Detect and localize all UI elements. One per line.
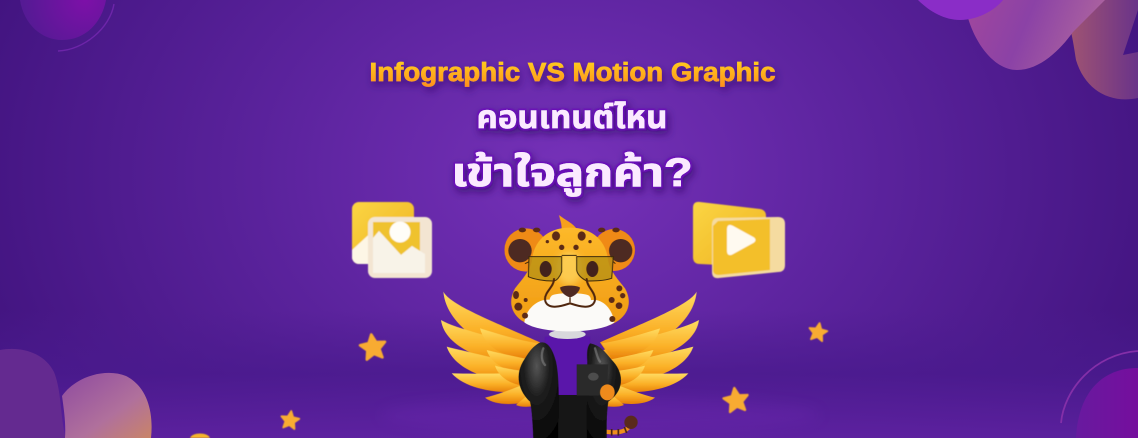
- tablet: [577, 364, 608, 396]
- neck: [549, 330, 586, 339]
- nose: [560, 286, 580, 297]
- decor: stage glow: [380, 397, 820, 433]
- tear marks: [545, 279, 595, 307]
- right wing: [600, 292, 699, 407]
- hand: [600, 384, 615, 400]
- title: Thai line 1: คอนเทนต์ไหน: [476, 99, 668, 135]
- left wing: [441, 292, 540, 407]
- decor: bottom-left blobs: [0, 349, 152, 438]
- right jacket panel: [587, 343, 621, 438]
- icon: stars: [190, 322, 828, 438]
- icon: image gallery: [352, 202, 432, 278]
- trousers: [543, 395, 607, 438]
- sunglasses: [525, 255, 615, 281]
- snout pads: [550, 293, 591, 306]
- ears: [504, 228, 635, 272]
- tail: [605, 416, 638, 436]
- icon: video player: [693, 202, 785, 278]
- forehead highlight: [556, 252, 583, 285]
- head: [511, 228, 629, 330]
- decor: top-right blobs: [918, 0, 1138, 99]
- jacket highlights: [542, 348, 600, 365]
- tuft: [559, 215, 577, 229]
- left jacket panel: [519, 342, 559, 438]
- decor: top-left circle and arc: [20, 0, 114, 51]
- decor: bottom-right circle and arc: [1061, 351, 1138, 438]
- purple shirt: [545, 337, 590, 397]
- white chin: [524, 300, 614, 331]
- mascot: cheetah with wings: [441, 215, 699, 438]
- title: English heading: Infographic VS Motion Graphic: [370, 59, 776, 87]
- title: Thai line 2: เข้าใจลูกค้า?: [452, 150, 692, 197]
- face spots: [513, 231, 625, 322]
